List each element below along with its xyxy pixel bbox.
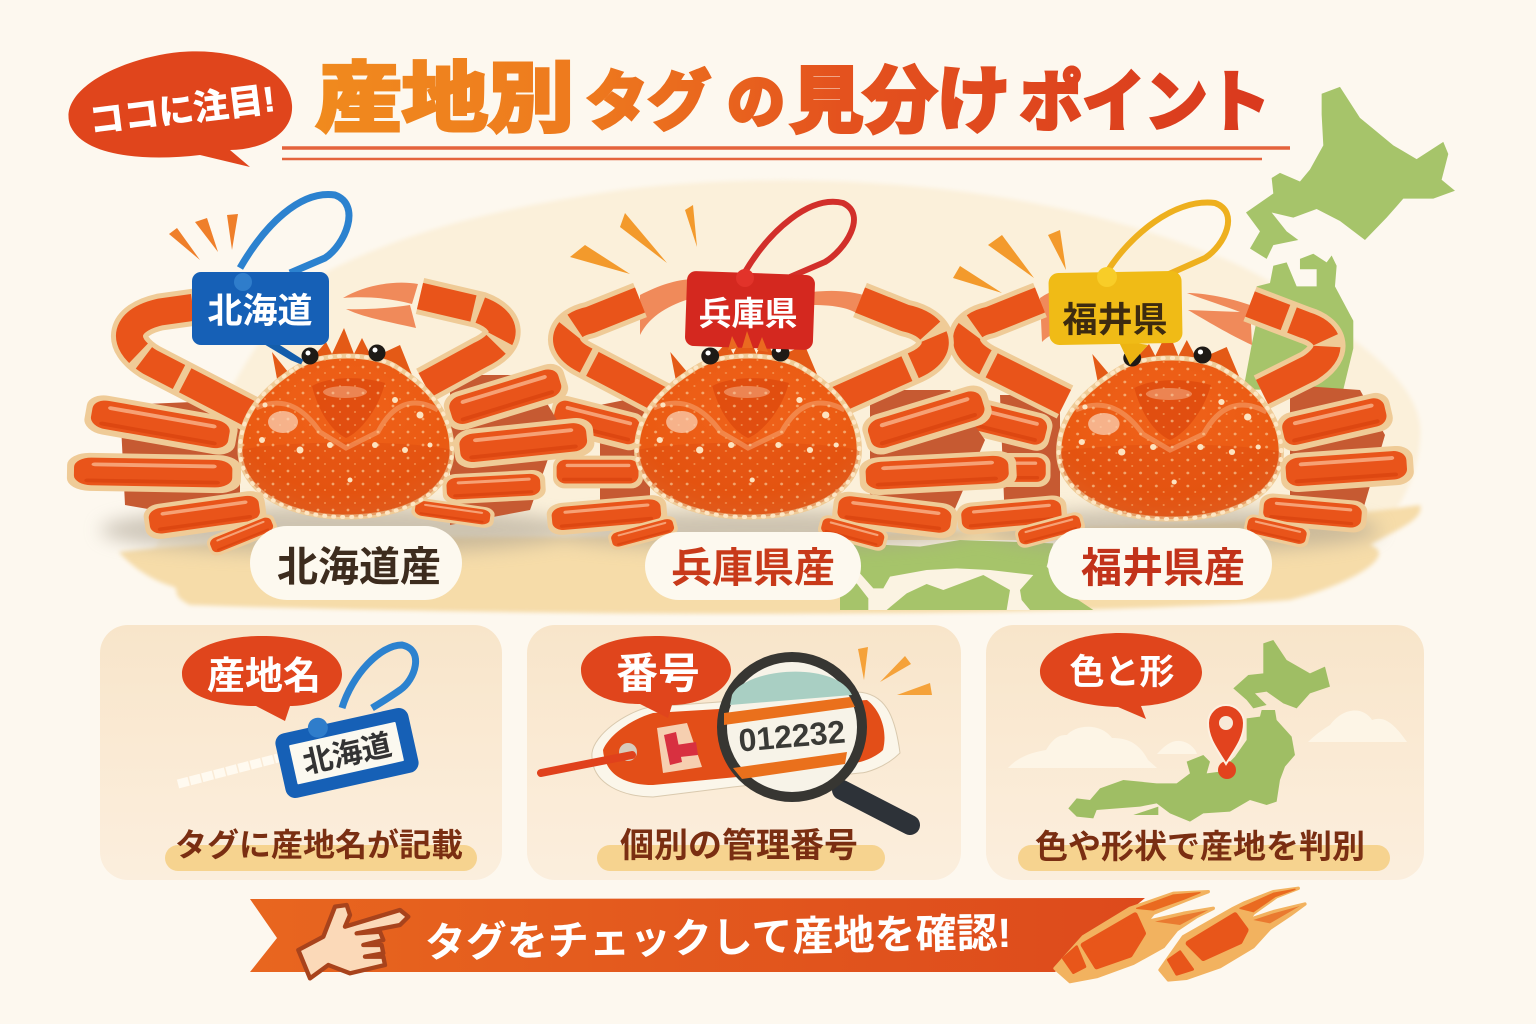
tag: Hokkaido (blue): 北海道 [207,292,313,331]
magnifier: 012232 [737,713,847,759]
tag: Fukui (yellow) [1048,203,1228,365]
icon: pointing hand [298,905,408,978]
main title: の [727,70,785,135]
crab ground shadows [100,506,1380,554]
label: 福井県産 [1048,528,1272,600]
caption: タグに産地名が記載 [175,827,463,863]
label: 兵庫県産: 兵庫県産 [671,545,835,591]
tag: Hokkaido (blue) [192,195,349,362]
caption highlight [1018,845,1390,871]
claw 1 [1055,892,1213,982]
icon: crab claws [1055,888,1305,982]
main title: タグ [586,66,710,138]
map of Japan, large background [1243,87,1455,390]
title underline [282,148,1290,159]
label: 北海道産: 北海道産 [277,544,441,590]
panel: 番号 [527,625,961,880]
tag: Fukui (yellow): 福井県 [1062,301,1168,340]
sparks [858,647,932,695]
tag: Hyogo (red): 兵庫県 [698,295,798,332]
caption: 個別の管理番号 [620,827,858,865]
map of Japan [1068,640,1330,822]
bottom banner [250,898,1145,972]
claw 2 [1160,888,1305,980]
map of Japan, lower green area [840,540,1093,610]
plastic strap [178,758,278,784]
title bubble: ココに注目! [68,51,292,167]
tag: Hyogo (red) [685,202,854,352]
label: 兵庫県産 [645,532,861,600]
caption: 色や形状で産地を判別 [1035,828,1365,865]
paper tag with number [541,692,900,797]
crab 2: Hyogo [546,279,1017,553]
magnifier [722,657,910,825]
label: 福井県産: 福井県産 [1081,545,1245,591]
title bubble: ココに注目!: ココに注目! [87,80,277,141]
main title: 産地別 [316,57,574,142]
bubble: 産地名 [182,636,342,721]
bubble: 番号: 番号 [616,650,700,697]
label: 北海道産 [250,526,462,600]
main title [316,57,1270,142]
crab 3: Fukui [949,288,1415,550]
sand background [119,180,1421,614]
crab 1: Hokkaido [67,283,596,558]
blue tag: 北海道 [300,729,395,780]
main title: ポイント [1020,65,1270,139]
sparks: tag 2 [570,205,697,274]
sparks: tag 1 [169,214,238,260]
bubble: 色と形: 色と形 [1069,653,1175,692]
bottom banner: タグをチェックして産地を確認! [424,910,1012,966]
clouds [1008,710,1407,768]
map pin [1208,705,1244,779]
caption highlight [165,845,477,871]
panel: 色と形 [986,625,1424,880]
tag loop [342,645,416,708]
sparks: tag 3 [953,230,1066,293]
blue tag [272,698,421,800]
main title: 見分け [790,62,1010,142]
panel: 産地名 [100,625,502,880]
caption highlight [597,845,885,871]
bubble: 番号 [581,636,731,718]
bubble: 産地名: 産地名 [207,656,321,698]
bubble: 色と形 [1040,633,1202,719]
